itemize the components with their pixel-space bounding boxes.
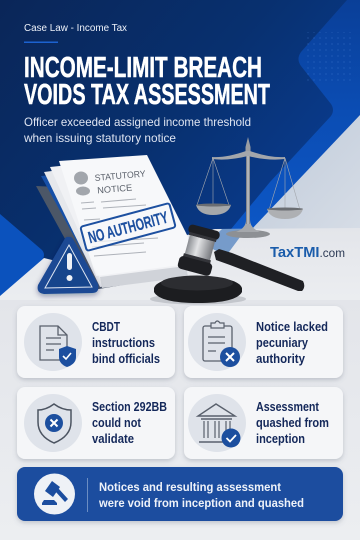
notice heading: STATUTORY [94, 169, 146, 183]
card text: Notice lacked [256, 320, 328, 334]
card text: authority [256, 352, 305, 366]
title [24, 52, 270, 111]
icon: gavel in circle [34, 474, 75, 514]
icon: courthouse with check [198, 404, 240, 448]
conclusion banner [17, 467, 343, 521]
icon: shield with cross [38, 404, 71, 443]
card: notice lacked authority [184, 306, 343, 378]
card text [256, 400, 329, 446]
card: section 292BB [17, 387, 175, 459]
card text: quashed from [256, 416, 329, 430]
subtitle: when issuing statutory notice [23, 131, 176, 145]
subtitle [23, 115, 251, 145]
card text: inception [256, 432, 305, 446]
card text [92, 400, 167, 446]
card text: pecuniary [256, 336, 308, 350]
category label: Case Law - Income Tax [24, 23, 127, 34]
main sheet [59, 155, 188, 276]
illustration: scales of justice [196, 137, 303, 238]
card text: Section 292BB [92, 400, 167, 414]
card text [92, 320, 160, 366]
card text: Assessment [256, 400, 320, 414]
icon: document with shield [40, 326, 76, 367]
logo: TaxTMI.com: TaxTMI.com [270, 244, 345, 261]
stamp: no authority: NO AUTHORITY [86, 209, 170, 247]
illustration: notice document stack [36, 155, 195, 290]
subtitle: Officer exceeded assigned income threshold [24, 115, 251, 129]
card text: could not [92, 416, 142, 430]
banner text: were void from inception and quashed [98, 496, 304, 510]
card text: validate [92, 432, 134, 446]
card text: instructions [92, 336, 155, 350]
notice heading [94, 169, 146, 195]
card text [256, 320, 328, 366]
banner text [98, 480, 304, 510]
notice heading: NOTICE [97, 182, 133, 195]
accent rule [24, 42, 58, 43]
card: assessment quashed [184, 387, 343, 459]
card text: CBDT [92, 320, 120, 334]
emblem [74, 172, 90, 196]
divider [86, 478, 89, 512]
card: CBDT instructions [17, 306, 175, 378]
card text: bind officials [92, 352, 160, 366]
icon: clipboard with cross [203, 321, 240, 367]
notice lines [81, 199, 158, 256]
icon: warning triangle [38, 237, 98, 294]
banner text: Notices and resulting assessment [99, 480, 281, 494]
title: INCOME-LIMIT BREACH [24, 52, 262, 84]
illustration: gavel [150, 223, 304, 304]
